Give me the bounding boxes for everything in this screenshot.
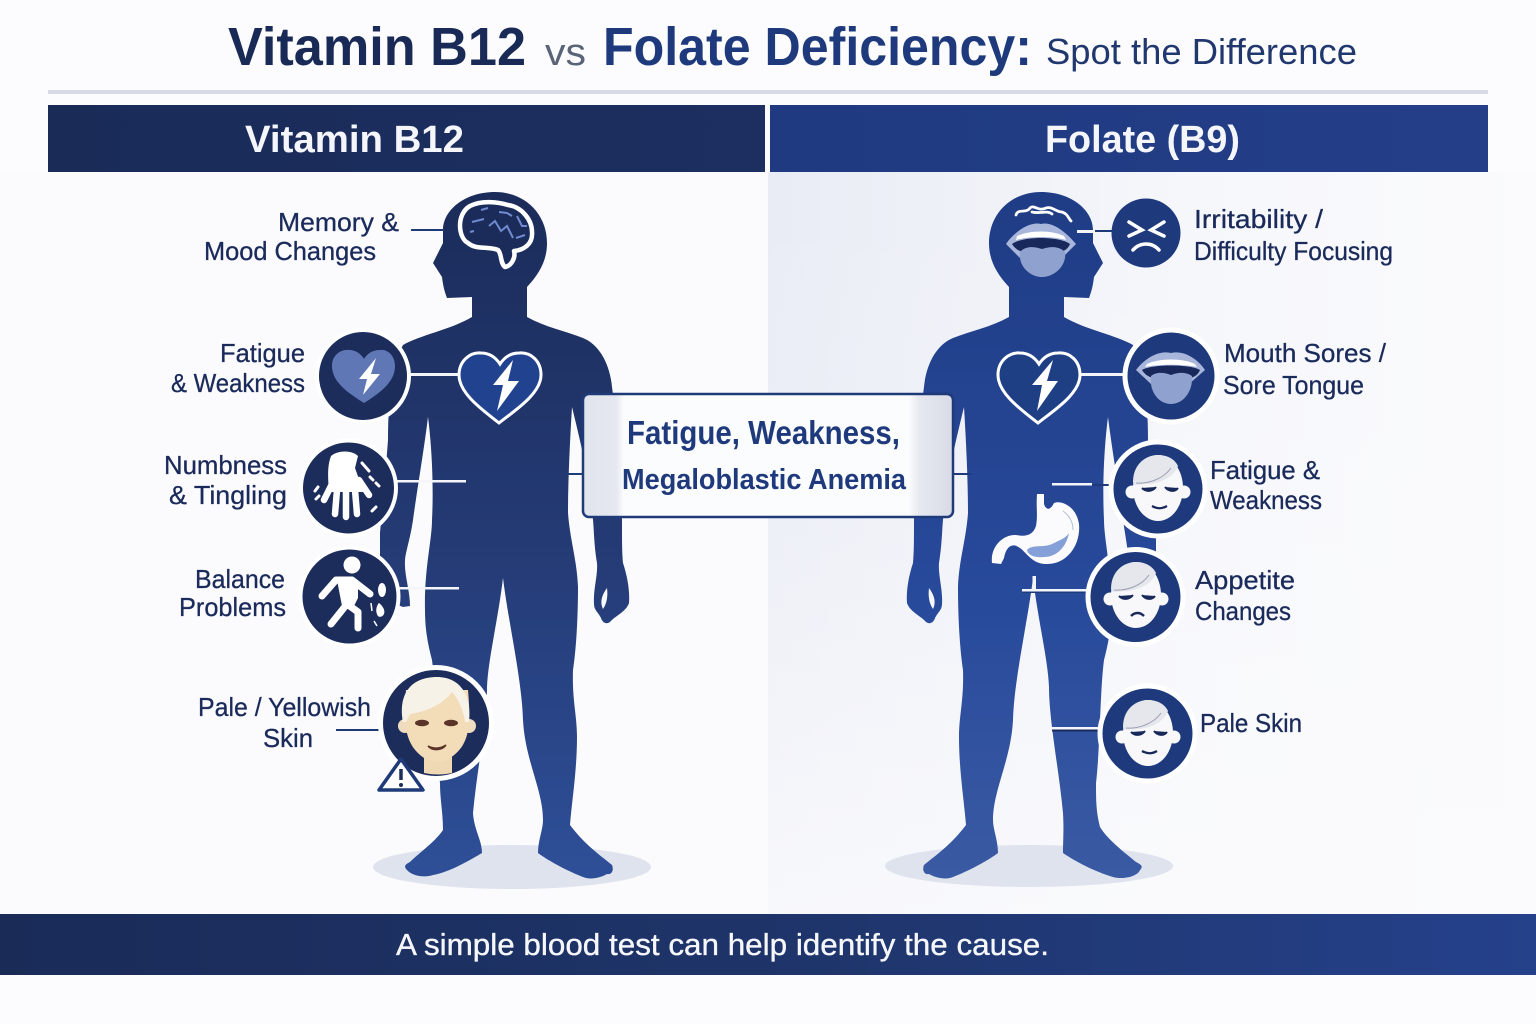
label: mouth sores <box>1223 338 1387 400</box>
label: fatigue and weakness: & Weakness <box>171 368 305 398</box>
title: Spot the Difference <box>1046 31 1357 72</box>
title: Folate Deficiency: <box>603 17 1032 77</box>
label: memory and mood <box>204 207 399 266</box>
connector: pale skin right <box>1052 727 1100 732</box>
label: irritability <box>1194 204 1393 266</box>
label: numbness and tingling: & Tingling <box>169 480 287 510</box>
header: Folate (B9) <box>770 105 1488 172</box>
callout: shared symptoms: Fatigue, Weakness, <box>627 414 900 451</box>
label: balance problems <box>179 564 286 622</box>
icon: heart with bolt, right figure <box>998 353 1080 423</box>
connector: fatigue right <box>1052 483 1116 486</box>
label: irritability: Difficulty Focusing <box>1194 236 1393 266</box>
figure: Folate body <box>907 192 1156 878</box>
label: mouth sores: Sore Tongue <box>1223 370 1364 400</box>
connector: balance <box>395 587 459 590</box>
title: vs <box>545 32 586 74</box>
floor shadow: right figure <box>885 845 1173 887</box>
connector: fatigue left <box>408 373 459 376</box>
hand notch: left figure <box>601 588 607 609</box>
icon: yellowish face circle <box>380 668 492 778</box>
connector: irritability <box>1077 230 1115 233</box>
label: appetite changes <box>1195 565 1295 626</box>
icon: mouth circle <box>1125 330 1217 422</box>
label: fatigue and weakness, right: Weakness <box>1210 485 1322 515</box>
header: Vitamin B12: Vitamin B12 <box>245 119 464 161</box>
label: balance problems: Balance <box>195 564 285 594</box>
connector: center box to left figure <box>565 473 583 475</box>
label: fatigue and weakness: Fatigue <box>220 338 305 368</box>
label: memory and mood: Mood Changes <box>204 236 376 266</box>
icon: brain <box>460 202 532 267</box>
label: pale yellowish skin: Skin <box>263 723 313 753</box>
icon: tired face circle <box>1111 442 1205 536</box>
connector: center box to right figure <box>953 473 971 475</box>
title: Vitamin B12 <box>228 17 526 77</box>
label: pale skin: Pale Skin <box>1200 708 1302 738</box>
label: appetite changes: Changes <box>1195 596 1291 626</box>
icon: heart with bolt, left figure <box>459 353 541 423</box>
label: balance problems: Problems <box>179 592 286 622</box>
icon: stomach <box>992 494 1079 564</box>
icon: irritated face circle <box>1112 198 1180 268</box>
hand notch: right figure <box>929 588 935 609</box>
label: fatigue and weakness, right: Fatigue & <box>1210 455 1320 485</box>
icon: balance walker circle <box>300 548 398 646</box>
header: Vitamin B12 <box>48 105 765 172</box>
label: numbness and tingling: Numbness <box>164 450 287 480</box>
label: memory and mood: Memory & <box>278 207 399 237</box>
label: pale yellowish skin: Pale / Yellowish <box>198 692 371 722</box>
floor shadow: left figure <box>373 845 651 889</box>
connector: numbness <box>392 480 466 482</box>
label: fatigue and weakness, right <box>1210 455 1322 515</box>
callout: shared symptoms: Megaloblastic Anemia <box>622 464 907 496</box>
icon: tongue in head, right figure <box>1006 207 1076 277</box>
label: appetite changes: Appetite <box>1195 565 1295 595</box>
connector: memory <box>411 229 444 231</box>
icon: fatigue heart circle <box>317 330 409 422</box>
footer banner: A simple blood test can help identify the cause. <box>396 927 1049 962</box>
label: mouth sores: Mouth Sores / <box>1224 338 1387 368</box>
icon: warning triangle <box>379 759 423 790</box>
figure: Vitamin B12 body <box>380 192 629 878</box>
connector: appetite <box>1022 576 1090 593</box>
connector: mouth sores <box>1081 373 1129 376</box>
icon: numb hand circle <box>301 440 396 536</box>
title <box>228 17 1357 77</box>
label: pale yellowish skin <box>198 692 371 753</box>
icon: pale face circle <box>1100 686 1195 781</box>
icon: sad face circle <box>1088 550 1183 644</box>
label: fatigue and weakness <box>171 338 305 398</box>
callout: shared symptoms <box>583 394 953 517</box>
label: numbness and tingling <box>164 450 287 510</box>
label: irritability: Irritability / <box>1194 204 1324 234</box>
footer banner <box>0 914 1536 975</box>
header: Folate (B9): Folate (B9) <box>1045 119 1240 161</box>
connector: pale skin left <box>336 729 386 731</box>
